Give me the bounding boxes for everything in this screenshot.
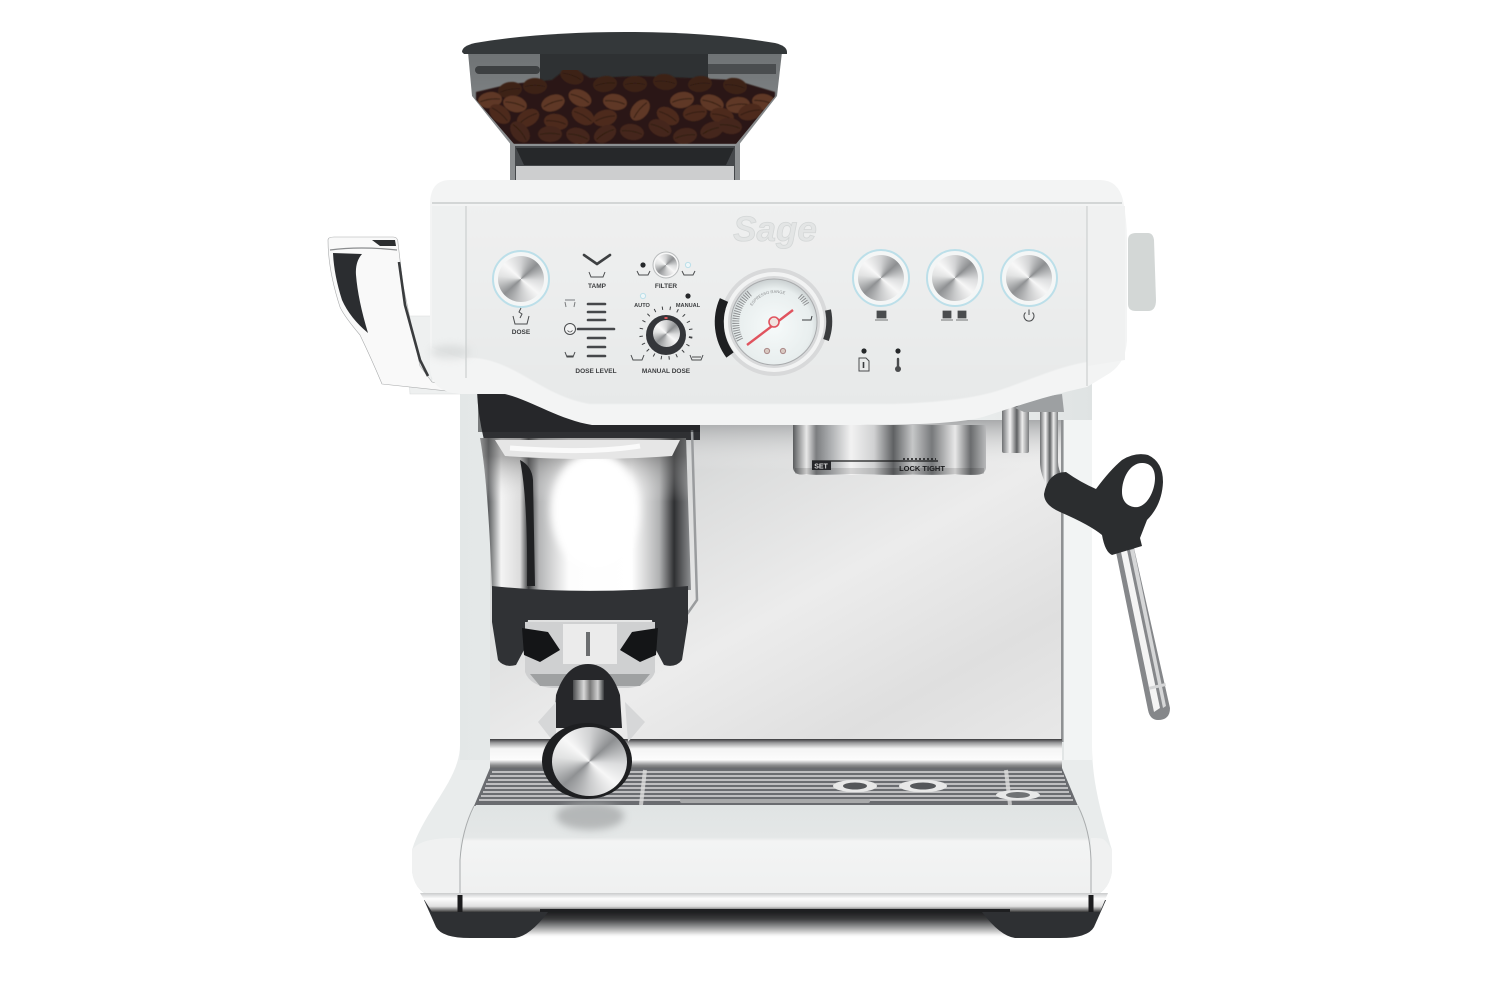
power button: [1001, 250, 1057, 321]
hopper bowl: [468, 52, 782, 146]
tamp indicator: [584, 255, 610, 290]
dose button: [493, 251, 549, 336]
head shadow on grinder: [478, 392, 700, 432]
portafilter: [522, 622, 658, 799]
group labels: SET: [814, 464, 829, 470]
drip tray grate: [474, 768, 1078, 806]
bean hopper: [462, 32, 787, 181]
steam pipe: [1049, 412, 1056, 484]
portafilter knob: [542, 723, 632, 799]
machine body columns: [460, 380, 1092, 760]
pressure gauge: ESPRESSO RANGE: [750, 290, 786, 306]
tamper handle: [328, 237, 460, 394]
hopper collar: [510, 143, 740, 181]
head front face: [466, 206, 1087, 404]
drain holes: [833, 780, 1040, 800]
black grip with ring: [1044, 454, 1163, 555]
one cup button: [853, 250, 909, 320]
dose level scale: [564, 300, 617, 375]
group labels: [812, 459, 945, 473]
floor shadow between feet: [505, 908, 1045, 936]
illustration: espresso machine: [328, 32, 1170, 938]
manual dose dial: MANUAL: [676, 303, 701, 309]
dose level scale: DOSE LEVEL: [575, 368, 617, 375]
manual dose dial: [631, 293, 703, 375]
filter selector: [637, 252, 695, 290]
portafilter neck: [554, 664, 622, 728]
hopper inner core: [475, 50, 776, 82]
coffee beans: [475, 70, 776, 144]
smile icon: [564, 324, 576, 334]
group labels: LOCK TIGHT: [899, 464, 945, 473]
tamp indicator: TAMP: [588, 283, 607, 290]
filter selector: FILTER: [655, 283, 677, 290]
hopper lid: [462, 32, 787, 54]
steam wand: [1002, 394, 1170, 720]
needle: [747, 310, 793, 345]
feet: [424, 900, 1106, 938]
backsplash: [490, 420, 1064, 742]
manual dose dial: AUTO: [634, 303, 651, 309]
drip tray front: [460, 802, 1091, 895]
pressure gauge: [714, 268, 832, 376]
info indicator: [859, 348, 869, 371]
group head: [793, 425, 986, 475]
brand logo: Sage: [733, 210, 817, 249]
gauge scale: [736, 293, 750, 340]
basket low: [565, 352, 575, 357]
dose icon: [513, 308, 529, 324]
base: [412, 745, 1112, 897]
steel wand: [1116, 548, 1170, 720]
machine head: [430, 180, 1127, 425]
basket high: [565, 300, 575, 307]
dose button: DOSE: [512, 329, 531, 336]
steam dial: [1128, 233, 1156, 311]
temperature indicator: [895, 348, 901, 372]
head shell: [430, 180, 1127, 425]
cradle collar: [492, 586, 688, 666]
chrome cup: [480, 438, 691, 590]
two cup button: [927, 250, 983, 320]
grinder chute and dosing cradle: [477, 392, 700, 666]
chrome strip: [420, 893, 1108, 912]
manual dose dial: MANUAL DOSE: [642, 368, 691, 375]
rear chrome band: [490, 739, 1062, 771]
